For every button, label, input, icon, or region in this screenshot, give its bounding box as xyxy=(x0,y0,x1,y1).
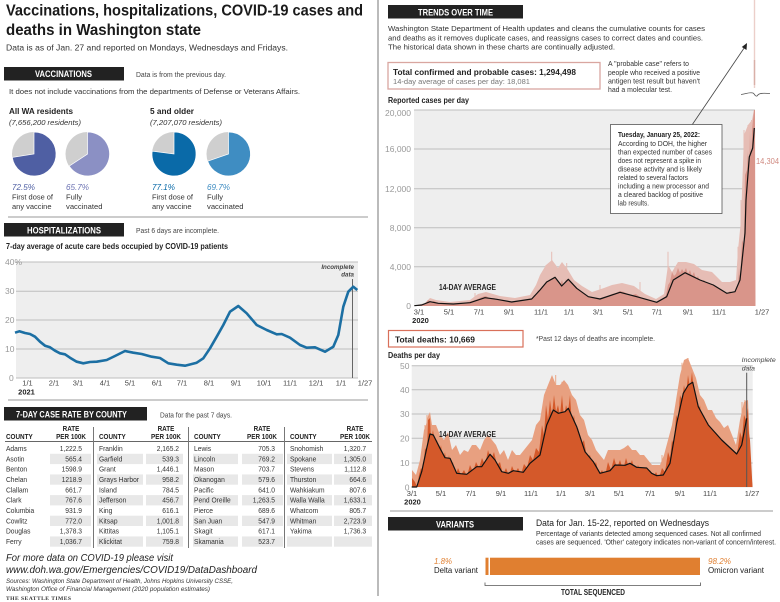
table: case rates: 703.7 xyxy=(258,465,275,474)
chart heading: 7-day average of acute care beds occupied by COVID-19 patients xyxy=(6,242,228,251)
note: past 7 days: Data for the past 7 days. xyxy=(160,412,232,420)
table: case rates: RATE xyxy=(63,426,80,433)
table: case rates: 456.7 xyxy=(162,496,179,505)
bar chart: reported cases: 16,000 xyxy=(385,144,411,154)
intro text: and deaths as it removes duplicate cases, and reassigns cases to correct dates and counties. xyxy=(388,33,703,42)
group: 5 and older: 69.7% xyxy=(207,183,230,192)
title: Vaccinations, hospitalizations, COVID-19 cases and xyxy=(6,2,363,20)
intro text: The historical data shown in these charts are continually adjusted. xyxy=(388,43,615,52)
callout: total deaths: Total deaths: 10,669 xyxy=(395,334,475,344)
annotation: January 25: disease activity and is likely xyxy=(618,164,702,174)
intro text xyxy=(388,24,705,52)
table: case rates: Yakima xyxy=(290,527,312,536)
sources: Sources: Washington State Department of Health, Johns Hopkins University CSSE, xyxy=(6,578,233,585)
logo: The Seattle Times: THE SEATTLE TIMES xyxy=(6,596,71,602)
group: all WA residents: any vaccine xyxy=(12,202,52,211)
heading: trends: TRENDS OVER TIME xyxy=(418,8,493,18)
table: case rates: 705.3 xyxy=(258,445,275,453)
table: case rates: COUNTY xyxy=(99,434,126,441)
sources: Washington Office of Financial Management (2020 population estimates) xyxy=(6,586,210,593)
note: incomplete days: Past 6 days are incomplete. xyxy=(136,228,219,235)
table: case rates: 641.0 xyxy=(258,486,275,494)
note: exclusions: It does not include vaccinations from the departments of Defense or Veterans Affairs. xyxy=(9,87,300,96)
table: case rates: 2,723.9 xyxy=(344,517,366,525)
annotation: January 25: does not represent a spike in xyxy=(618,156,701,165)
bar chart: reported cases: 9/1 xyxy=(504,308,514,316)
table: case rates: Spokane xyxy=(290,455,316,463)
line chart: hospital beds: 11/1 xyxy=(283,378,297,388)
bar chart: reported cases: 3/1 xyxy=(593,308,603,316)
bar chart: reported cases: 9/1 xyxy=(683,308,693,316)
note: previous day: Data is from the previous day. xyxy=(136,72,226,79)
bar chart: deaths: 5/1 xyxy=(614,489,624,498)
label: omicron xyxy=(708,557,765,575)
variants description xyxy=(536,518,776,546)
table: case rates: 664.6 xyxy=(349,476,366,484)
heading: trends xyxy=(388,5,523,18)
callout: total cases: Total confirmed and probable cases: 1,294,498 xyxy=(393,67,576,77)
table: case rates: 1,736.3 xyxy=(344,527,366,536)
link: more data xyxy=(6,553,257,576)
table: case rates: 805.7 xyxy=(349,507,366,515)
line chart: hospital beds: 12/1 xyxy=(309,378,323,388)
heading: county rate: 7-DAY CASE RATE BY COUNTY xyxy=(16,410,128,420)
bar chart: reported cases: 2020 xyxy=(412,316,429,325)
table: case rates: 661.7 xyxy=(65,486,82,494)
bracket: total sequenced: TOTAL SEQUENCED xyxy=(561,588,625,597)
line chart: hospital beds: 5/1 xyxy=(125,378,135,388)
annotation: January 25: than expected number of cases xyxy=(618,148,712,156)
table: case rates: Grant xyxy=(99,465,116,474)
table: case rates: Garfield xyxy=(99,455,122,463)
link: more data: www.doh.wa.gov/Emergencies/COVID19/DataDashboard xyxy=(6,565,257,576)
table: case rates: Jefferson xyxy=(99,496,126,505)
table: case rates: Walla Walla xyxy=(290,496,325,505)
bar chart: reported cases: 12,000 xyxy=(385,184,411,194)
bar chart: reported cases: 11/1 xyxy=(534,308,548,316)
panel: county case rates xyxy=(4,407,372,548)
note: probable case xyxy=(608,59,700,94)
arrow: annotation pointer xyxy=(692,43,747,125)
table: case rates: Columbia xyxy=(6,507,34,515)
line chart: hospital beds: 3/1 xyxy=(73,378,83,388)
table: case rates: Franklin xyxy=(99,445,123,453)
table: case rates: 617.1 xyxy=(258,527,275,536)
line chart: hospital beds: 2021 xyxy=(18,388,35,396)
bar chart: deaths: 14-DAY AVERAGE xyxy=(439,430,497,439)
bar chart: deaths: data xyxy=(742,366,755,372)
bar chart: deaths: 11/1 xyxy=(703,489,717,498)
bar chart: deaths: 50 xyxy=(400,361,410,371)
group: all WA residents: First dose of xyxy=(12,192,54,202)
panel: trends over time xyxy=(385,0,780,506)
line chart: hospital beds: 6/1 xyxy=(152,378,162,388)
bar chart: reported cases: 14,304 xyxy=(756,157,780,166)
heading: vaccinations xyxy=(4,67,124,80)
table: case rates: 1598.9 xyxy=(62,465,82,474)
table: case rates: 1,105.1 xyxy=(157,527,179,536)
line chart: hospital beds: data xyxy=(341,272,355,278)
label: delta: 1.8% xyxy=(434,557,452,566)
bar chart: reported cases xyxy=(385,0,780,325)
table: case rates: 1,001.8 xyxy=(157,517,179,525)
bar chart: deaths: 30 xyxy=(400,409,410,419)
table: case rates: 1,222.5 xyxy=(60,445,82,453)
table: case rates: Pend Oreille xyxy=(194,496,231,505)
table: case rates: 931.9 xyxy=(65,507,82,515)
table: case rates: 1218.9 xyxy=(62,476,82,484)
table: case rates: 784.5 xyxy=(162,486,179,494)
table: case rates: 565.4 xyxy=(65,455,82,463)
bar chart: deaths: 20 xyxy=(400,434,410,444)
table: case rates: Clallam xyxy=(6,486,28,494)
line chart: hospital beds: Incomplete xyxy=(321,264,355,271)
chart heading: cases: Reported cases per day xyxy=(388,96,470,105)
table: case rates: 616.1 xyxy=(162,507,179,515)
label: delta: Delta variant xyxy=(434,566,479,575)
bar chart: deaths: 9/1 xyxy=(675,489,685,498)
bar chart: deaths: 5/1 xyxy=(436,489,446,498)
bar chart: deaths: 0 xyxy=(405,482,410,492)
note: deaths incomplete: *Past 12 days of deaths are incomplete. xyxy=(536,336,655,343)
table: case rates: Thurston xyxy=(290,476,316,484)
table: case rates: Grays Harbor xyxy=(99,476,140,484)
line chart: hospital beds: 10 xyxy=(5,344,15,354)
line chart: hospital beds: 30 xyxy=(5,286,15,296)
chart heading: deaths: Deaths per day xyxy=(388,351,441,360)
table: case rates: Whitman xyxy=(290,517,316,525)
bracket: total sequenced xyxy=(485,582,700,597)
table: case rates: Pierce xyxy=(194,507,213,515)
table: case rates: Cowlitz xyxy=(6,517,28,525)
subtitle: Data is as of Jan. 27 and reported on Mondays, Wednesdays and Fridays. xyxy=(6,42,288,52)
bar chart: reported cases: 20,000 xyxy=(385,108,411,118)
callout: total cases: 14-day average of cases per day: 18,081 xyxy=(393,77,530,86)
group: all WA residents: (7,656,200 residents) xyxy=(9,118,81,127)
bar chart: deaths: 1/1 xyxy=(556,489,566,498)
table: case rates: 539.3 xyxy=(162,455,179,463)
table: case rates: RATE xyxy=(158,426,175,433)
bar: variant share xyxy=(486,558,700,575)
table: case rates: 1,446.1 xyxy=(157,465,179,474)
title: deaths in Washington state xyxy=(6,22,201,39)
table: case rates: Benton xyxy=(6,465,27,474)
table: case rates: 579.6 xyxy=(258,476,275,484)
table: case rates: COUNTY xyxy=(6,434,33,441)
table: case rates: 689.6 xyxy=(258,507,275,515)
bar chart: deaths: 7/1 xyxy=(466,489,476,498)
group: 5 and older: First dose of xyxy=(152,192,194,202)
table: case rates: Kittitas xyxy=(99,527,119,536)
annotation: January 25: related to several factors xyxy=(618,173,688,182)
group: 5 and older: 5 and older xyxy=(150,106,195,116)
line chart: hospital beds: 0 xyxy=(9,373,14,383)
note: probable case: had a molecular test. xyxy=(608,85,672,94)
table: case rates: 1,112.8 xyxy=(344,465,366,474)
group: 5 and older: 77.1% xyxy=(152,183,175,192)
table: case rates: Snohomish xyxy=(290,445,323,453)
table: case rates: COUNTY xyxy=(194,434,221,441)
bar chart: reported cases: 1/27 xyxy=(755,308,769,316)
table: case rates: Lincoln xyxy=(194,455,215,463)
callout: total deaths xyxy=(388,330,523,347)
heading: hospitalizations xyxy=(4,223,124,236)
bar chart: deaths: 2020 xyxy=(404,498,421,506)
link: more data: For more data on COVID-19 please visit xyxy=(6,553,174,564)
table: case rates: 807.6 xyxy=(349,486,366,494)
table: case rates: 1,378.3 xyxy=(60,527,82,536)
bar chart: deaths: 3/1 xyxy=(585,489,595,498)
bar chart: reported cases: 7/1 xyxy=(652,308,662,316)
table: case rates: 769.2 xyxy=(258,455,275,463)
table: case rates: 1,036.7 xyxy=(60,538,82,546)
heading: vaccinations: VACCINATIONS xyxy=(35,69,92,80)
group: 5 and older: (7,207,070 residents) xyxy=(150,118,222,127)
group: 5 and older: Fully xyxy=(207,192,223,202)
bar chart: deaths: 1/27 xyxy=(745,489,759,498)
intro text: Washington State Department of Health updates and cleans the cumulative counts for cases xyxy=(388,24,705,33)
table: case rates: Asotin xyxy=(6,455,25,463)
table: case rates: Kitsap xyxy=(99,517,118,525)
table: case rates: Stevens xyxy=(290,465,314,474)
table: case rates: Clark xyxy=(6,496,22,505)
line chart: hospital beds xyxy=(5,257,372,396)
group: all WA residents: 65.7% xyxy=(66,183,89,192)
table: case rates xyxy=(5,426,372,548)
line chart: hospital beds: 40% xyxy=(5,257,22,267)
annotation: January 25: a cleared backlog of positive xyxy=(618,190,703,199)
bar chart: deaths: 10 xyxy=(400,458,410,468)
bar chart: reported cases: 14-DAY AVERAGE xyxy=(439,283,497,292)
group: all WA residents: Fully xyxy=(66,192,82,202)
table: case rates: 523.7 xyxy=(258,538,275,546)
table: case rates: San Juan xyxy=(194,517,222,525)
table: case rates: Okanogan xyxy=(194,476,225,484)
table: case rates: Klickitat xyxy=(99,538,122,546)
line chart: hospital beds: 1/27 xyxy=(358,378,372,388)
table: case rates: Adams xyxy=(6,445,27,453)
table: case rates: Skamania xyxy=(194,538,224,546)
table: case rates: 1,263.5 xyxy=(253,496,275,505)
bar chart: deaths: 11/1 xyxy=(524,489,538,498)
bar chart: reported cases: 1/1 xyxy=(564,308,574,316)
callout: total cases xyxy=(388,62,600,89)
table: case rates: 2,165.2 xyxy=(157,445,179,453)
table: case rates: 772.0 xyxy=(65,517,82,525)
group: all WA residents: vaccinated xyxy=(66,202,102,211)
table: case rates: PER 100K xyxy=(151,434,181,441)
table: case rates: 547.9 xyxy=(258,517,275,525)
bar chart: deaths: 9/1 xyxy=(496,489,506,498)
panel: vaccinations xyxy=(4,67,300,211)
line chart: hospital beds: 9/1 xyxy=(231,378,241,388)
group: 5 and older: vaccinated xyxy=(207,202,244,211)
table: case rates: 767.6 xyxy=(65,496,82,505)
table: case rates: 958.2 xyxy=(162,476,179,484)
panel: variants xyxy=(388,517,776,597)
line chart: hospital beds: 7/1 xyxy=(177,378,187,388)
annotation: January 25: including a new processor and xyxy=(618,182,709,190)
table: case rates: PER 100K xyxy=(340,434,370,441)
label: delta xyxy=(434,557,479,575)
annotation: January 25 xyxy=(610,124,722,214)
sources xyxy=(6,578,233,593)
line chart: hospital beds: 8/1 xyxy=(204,378,214,388)
table: case rates: Wahkiakum xyxy=(290,486,325,494)
line chart: hospital beds: 1/1 xyxy=(22,378,33,388)
group: all WA residents xyxy=(9,106,110,211)
table: case rates: King xyxy=(99,507,112,515)
line chart: hospital beds: 2/1 xyxy=(49,378,59,388)
table: case rates: Mason xyxy=(194,465,214,474)
bar chart: reported cases: 5/1 xyxy=(623,308,633,316)
annotation: January 25: lab results. xyxy=(618,198,649,208)
bar chart: deaths: 7/1 xyxy=(645,489,655,498)
table: case rates: 759.8 xyxy=(162,538,179,546)
bar chart: deaths: Incomplete xyxy=(742,357,776,364)
bar chart: deaths xyxy=(400,357,776,506)
title xyxy=(6,2,363,39)
note: probable case: antigen test result but haven't xyxy=(608,76,700,86)
group: all WA residents: 72.5% xyxy=(12,183,35,192)
heading: hospitalizations: HOSPITALIZATIONS xyxy=(27,226,101,236)
bar chart: reported cases: 4,000 xyxy=(390,262,411,272)
variants description: Data for Jan. 15-22, reported on Wednesdays xyxy=(536,518,710,528)
heading: variants xyxy=(388,517,523,530)
axis break xyxy=(741,93,770,96)
panel: hospitalizations xyxy=(4,223,372,396)
table: case rates: Douglas xyxy=(6,527,31,536)
table: case rates: Skagit xyxy=(194,527,213,536)
line chart: hospital beds: 1/1 xyxy=(336,378,346,388)
bar chart: reported cases: 11/1 xyxy=(712,308,726,316)
bar chart: reported cases: 8,000 xyxy=(390,223,411,233)
group: all WA residents: All WA residents xyxy=(9,106,73,116)
table: case rates: Lewis xyxy=(194,445,211,453)
line chart: hospital beds: 10/1 xyxy=(257,378,271,388)
table: case rates: 1,633.1 xyxy=(344,496,366,505)
table: case rates: Island xyxy=(99,486,117,494)
bar chart: reported cases: 0 xyxy=(406,301,411,311)
heading: variants: VARIANTS xyxy=(436,520,474,530)
heading: county rate xyxy=(4,407,147,420)
note: probable case: people who received a positive xyxy=(608,68,700,77)
table: case rates: 1,320.7 xyxy=(344,445,366,453)
table: case rates: PER 100K xyxy=(56,434,86,441)
annotation: January 25: According to DOH, the higher xyxy=(618,139,708,148)
table: case rates: Whatcom xyxy=(290,507,318,515)
label: omicron: Omicron variant xyxy=(708,566,765,575)
table: case rates: PER 100K xyxy=(247,434,277,441)
annotation: January 25: Tuesday, January 25, 2022: xyxy=(618,132,700,139)
bar chart: reported cases: 7/1 xyxy=(474,308,484,316)
note: probable case: A "probable case" refers to xyxy=(608,59,689,68)
bar chart: deaths: 3/1 xyxy=(407,489,417,498)
table: case rates: RATE xyxy=(347,426,364,433)
table: case rates: Ferry xyxy=(6,538,22,546)
table: case rates: Chelan xyxy=(6,476,27,484)
group: 5 and older xyxy=(150,106,250,211)
table: case rates: Pacific xyxy=(194,486,214,494)
table: case rates: 1,305.0 xyxy=(344,455,366,463)
group: 5 and older: any vaccine xyxy=(152,202,192,211)
bar chart: reported cases: 5/1 xyxy=(444,308,454,316)
line chart: hospital beds: 4/1 xyxy=(100,378,110,388)
bar chart: reported cases: 3/1 xyxy=(414,308,424,316)
table: case rates: RATE xyxy=(254,426,271,433)
variants description: Percentage of variants detected among sequenced cases. Not all confirmed xyxy=(536,529,761,538)
label: omicron: 98.2% xyxy=(708,557,731,566)
table: case rates: COUNTY xyxy=(290,434,317,441)
bar chart: deaths: 40 xyxy=(400,385,410,395)
line chart: hospital beds: 20 xyxy=(5,315,15,325)
